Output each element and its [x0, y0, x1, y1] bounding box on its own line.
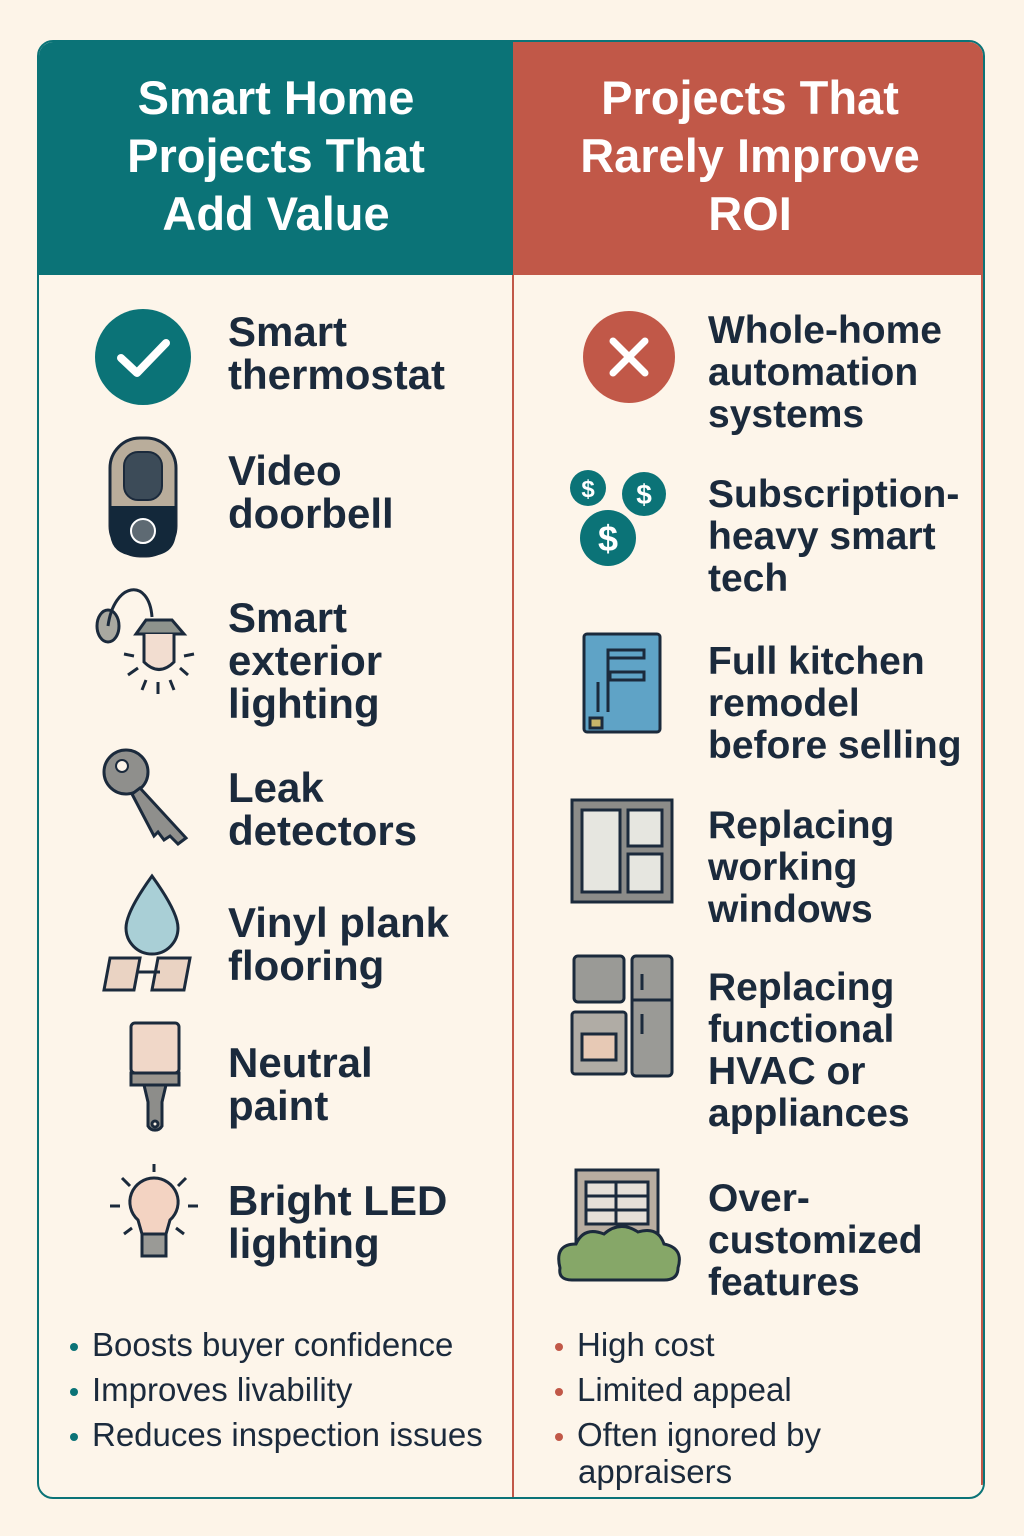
text: full kitchen remodel: Full kitchen: [708, 640, 925, 683]
text: bright LED lighting: Bright LED: [228, 1177, 447, 1224]
header: rarely improve ROI: Projects That: [601, 70, 899, 124]
text: replacing functional HVAC: [708, 966, 910, 1135]
text: full kitchen remodel: [708, 640, 962, 767]
header: add value: [39, 42, 513, 275]
text: full kitchen remodel: remodel: [708, 682, 860, 725]
header: rarely improve ROI: ROI: [708, 186, 792, 240]
divider: [512, 275, 514, 1505]
text: replacing functional HVAC: Replacing: [708, 966, 894, 1009]
icon: video doorbell: [108, 436, 178, 558]
icon: house with bush: [557, 1168, 681, 1282]
right border: [981, 275, 983, 1485]
text: vinyl plank flooring: flooring: [228, 942, 384, 989]
text: replacing working windows: windows: [708, 888, 873, 931]
text: video doorbell: Video: [228, 447, 342, 494]
icon: light bulb: [110, 1164, 198, 1258]
bullets: right drawbacks: Limited appeal: [577, 1371, 792, 1408]
bullets: left benefits: Boosts buyer confidence: [92, 1326, 453, 1363]
text: whole-home automation: automation: [708, 351, 918, 394]
text: smart exterior lighting: exterior: [228, 637, 382, 684]
header: rarely improve ROI: Rarely Improve: [580, 128, 920, 182]
text: video doorbell: [228, 447, 394, 537]
text: full kitchen remodel: before selling: [708, 724, 962, 767]
text: bright LED lighting: [228, 1177, 447, 1267]
bullets: left benefits: Reduces inspection issues: [92, 1416, 483, 1453]
text: over-customized features: features: [708, 1261, 860, 1304]
text: subscription-heavy smart tech: heavy smart: [708, 515, 936, 558]
header: add value: Projects That: [127, 128, 425, 182]
text: replacing working windows: [708, 804, 894, 931]
text: over-customized features: [708, 1177, 923, 1304]
text: neutral paint: [228, 1039, 373, 1129]
text: whole-home automation: [708, 309, 942, 436]
text: replacing working windows: Replacing: [708, 804, 894, 847]
icon: check: [95, 309, 191, 405]
text: whole-home automation: Whole-home: [708, 309, 942, 352]
text: leak detectors: [228, 764, 417, 854]
bullets: left benefits: Improves livability: [92, 1371, 352, 1408]
text: over-customized features: Over-: [708, 1177, 810, 1220]
text: smart thermostat: Smart: [228, 308, 347, 355]
text: over-customized features: customized: [708, 1219, 923, 1262]
text: smart exterior lighting: lighting: [228, 680, 380, 727]
text: vinyl plank flooring: Vinyl plank: [228, 899, 449, 946]
icon: coins: $: [636, 479, 652, 510]
icon: drop and planks: [102, 874, 192, 992]
text: bright LED lighting: lighting: [228, 1220, 380, 1267]
text: smart thermostat: [228, 308, 445, 398]
text: replacing functional HVAC: appliances: [708, 1092, 910, 1135]
text: subscription-heavy smart tech: tech: [708, 557, 788, 600]
icon: exterior lamp: [96, 588, 194, 694]
text: replacing working windows: working: [708, 846, 858, 889]
header: add value: Smart Home: [138, 70, 414, 124]
text: leak detectors: detectors: [228, 807, 417, 854]
bullets: right drawbacks: [555, 1326, 821, 1490]
text: whole-home automation: systems: [708, 393, 864, 436]
header: add value: Add Value: [162, 186, 390, 240]
bullets: right drawbacks: High cost: [577, 1326, 715, 1363]
text: smart thermostat: thermostat: [228, 351, 445, 398]
icon: window: [570, 798, 674, 904]
text: leak detectors: Leak: [228, 764, 324, 811]
text: smart exterior lighting: Smart: [228, 594, 347, 641]
text: replacing functional HVAC: HVAC or: [708, 1050, 865, 1093]
text: neutral paint: paint: [228, 1082, 328, 1129]
icon: key: [102, 748, 188, 846]
bullets: right drawbacks: appraisers: [578, 1453, 732, 1490]
text: subscription-heavy smart tech: [708, 473, 959, 600]
icon: coins: $: [581, 476, 595, 503]
bullets: right drawbacks: Often ignored by: [577, 1416, 821, 1453]
text: subscription-heavy smart tech: Subscription-: [708, 473, 959, 516]
icon: paint brush: [130, 1022, 180, 1132]
header: rarely improve ROI: [513, 42, 987, 275]
icon: coins: $: [598, 518, 618, 559]
icon: x: [583, 311, 675, 403]
text: replacing functional HVAC: functional: [708, 1008, 894, 1051]
icon: appliances: [570, 954, 674, 1078]
bullets: left benefits: [70, 1326, 483, 1453]
text: smart exterior lighting: [228, 594, 382, 727]
text: vinyl plank flooring: [228, 899, 449, 989]
text: neutral paint: Neutral: [228, 1039, 373, 1086]
icon: kitchen cabinet: [582, 632, 662, 734]
icon: coins: [570, 470, 666, 566]
text: video doorbell: doorbell: [228, 490, 394, 537]
